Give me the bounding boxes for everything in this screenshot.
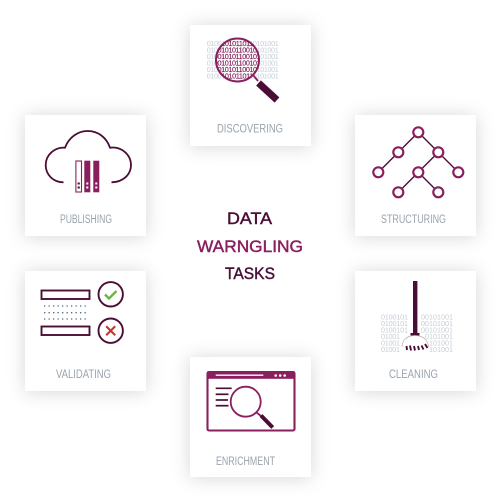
icon: tree diagram <box>373 127 463 197</box>
icon: checklist <box>42 282 123 343</box>
binary data right: 00101001 <box>421 312 453 322</box>
binary data right: 00101001 <box>421 319 453 328</box>
binary data background: 01001010110010101001 <box>207 58 279 68</box>
binary data right: 0101001 <box>425 332 453 341</box>
binary data under the lens: 01001010110010101001 <box>207 52 279 61</box>
binary data right: 101001 <box>429 338 453 348</box>
binary data under the lens: 01001010110010101001 <box>207 65 279 74</box>
binary data under the lens: 01001010110010101001 <box>207 58 279 68</box>
label: enrichment: ENRICHMENT <box>216 456 275 468</box>
binary data right: 101001 <box>429 345 453 354</box>
panel: publishing <box>25 115 146 236</box>
icon: cloud <box>46 131 131 182</box>
binary data left: 0100101 <box>381 319 408 328</box>
label: cleaning: CLEANING <box>389 369 438 381</box>
binary data left: 01001 <box>381 345 400 354</box>
label: structuring: STRUCTURING <box>381 214 446 226</box>
icon: magnifying glass <box>216 38 277 100</box>
binary data left: 0100101 <box>381 326 408 334</box>
binary data background: 01001010110110101001 <box>207 72 279 80</box>
panel: validating <box>25 271 146 391</box>
binary data right <box>421 312 453 354</box>
binary data background: 01001010110010101001 <box>207 52 279 61</box>
icon: server books <box>76 161 99 192</box>
binary data left: 0100101 <box>381 312 408 322</box>
binary data under the lens: 01001010110110101001 <box>207 72 279 80</box>
panel: structuring <box>355 115 476 236</box>
label: validating: VALIDATING <box>56 369 111 381</box>
icon: broom <box>402 281 428 350</box>
binary data under the lens: 01001010110010101001 <box>207 46 279 54</box>
binary data background: 01001010110110101001 <box>207 39 279 48</box>
binary data right: 00101001 <box>421 326 453 334</box>
label: publishing: PUBLISHING <box>60 214 112 226</box>
binary data under the lens: 01001010110110101001 <box>207 39 279 48</box>
panel: cleaning <box>355 271 476 391</box>
title: data wrangling tasks <box>197 209 303 283</box>
binary data left: 01001 <box>381 332 400 341</box>
title: data wrangling tasks: DATA <box>227 209 273 228</box>
binary data left: 01001 <box>381 338 400 348</box>
panel: enrichment <box>190 357 311 477</box>
title: data wrangling tasks: WARNGLING <box>197 237 303 256</box>
label: discovering: DISCOVERING <box>217 124 283 136</box>
binary data under the lens <box>217 40 258 79</box>
binary data background: 01001010110010101001 <box>207 46 279 54</box>
title: data wrangling tasks: TASKS <box>225 264 275 283</box>
binary data background <box>207 39 279 80</box>
icon: browser window with magnifier <box>207 372 295 430</box>
binary data background: 01001010110010101001 <box>207 65 279 74</box>
binary data left <box>381 312 408 354</box>
panel: discovering <box>190 25 311 146</box>
